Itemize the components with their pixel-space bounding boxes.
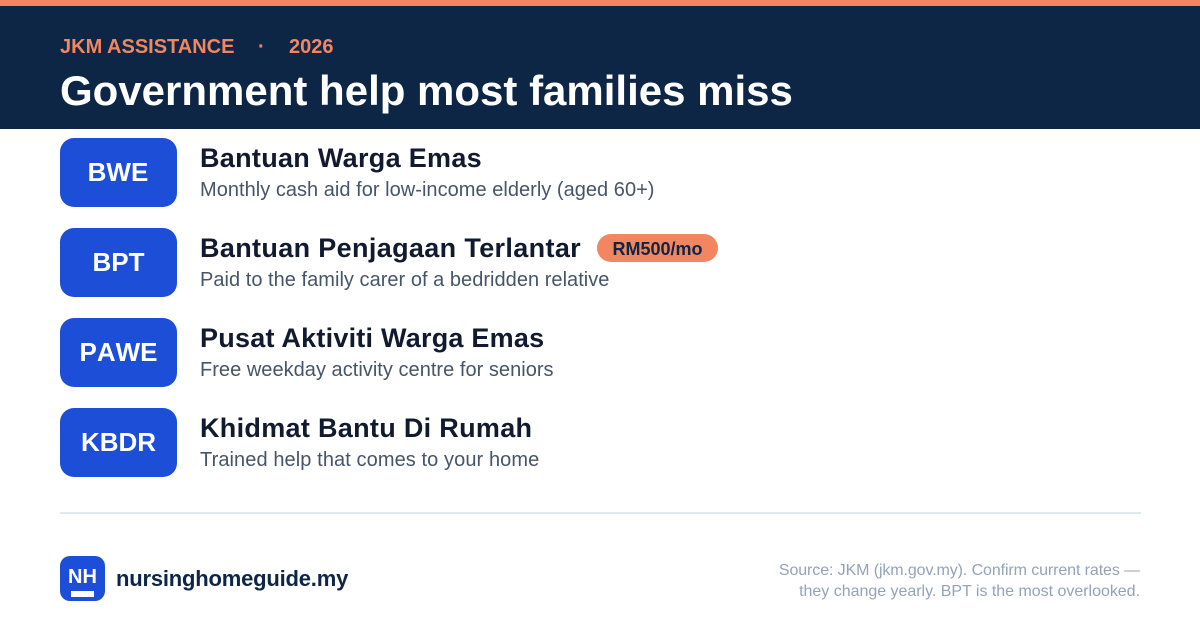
eyebrow year: 2026 bbox=[289, 36, 334, 58]
badge: BPT bbox=[60, 228, 177, 297]
logo icon bbox=[60, 556, 105, 601]
logo letters: NH bbox=[68, 566, 97, 588]
logo underline bbox=[71, 591, 94, 597]
eyebrow: JKM ASSISTANCE bbox=[60, 36, 234, 58]
source note: Source: JKM (jkm.gov.my). Confirm current rates — bbox=[779, 562, 1140, 579]
row text: PAWE: Free weekday activity centre for seniors bbox=[200, 359, 554, 381]
row title: BPT: Bantuan Penjagaan Terlantar bbox=[200, 233, 581, 263]
row title: PAWE: Pusat Aktiviti Warga Emas bbox=[200, 323, 544, 353]
row text: BWE: Monthly cash aid for low-income elderly (aged 60+) bbox=[200, 179, 654, 201]
badge: BWE bbox=[60, 138, 177, 207]
row title: KBDR: Khidmat Bantu Di Rumah bbox=[200, 413, 532, 443]
badge: BPT: BPT bbox=[92, 247, 144, 277]
row title: BWE: Bantuan Warga Emas bbox=[200, 143, 482, 173]
badge: PAWE: PAWE bbox=[80, 337, 158, 367]
brand name: nursinghomeguide.my bbox=[116, 566, 348, 591]
title: Government help most families miss bbox=[60, 67, 793, 114]
source note bbox=[779, 562, 1140, 600]
row text: BPT: Paid to the family carer of a bedridden relative bbox=[200, 269, 609, 291]
row text: KBDR: Trained help that comes to your home bbox=[200, 449, 539, 471]
badge: BWE: BWE bbox=[88, 157, 148, 187]
pill: RM500/mo: RM500/mo bbox=[612, 239, 703, 259]
source note: they change yearly. BPT is the most overlooked. bbox=[799, 583, 1140, 600]
eyebrow separator: · bbox=[258, 36, 265, 58]
header panel bbox=[0, 6, 1200, 129]
top accent bar bbox=[0, 0, 1200, 6]
badge: KBDR bbox=[60, 408, 177, 477]
pill: RM500/mo bbox=[597, 234, 718, 262]
badge: KBDR: KBDR bbox=[81, 427, 156, 457]
badge: PAWE bbox=[60, 318, 177, 387]
